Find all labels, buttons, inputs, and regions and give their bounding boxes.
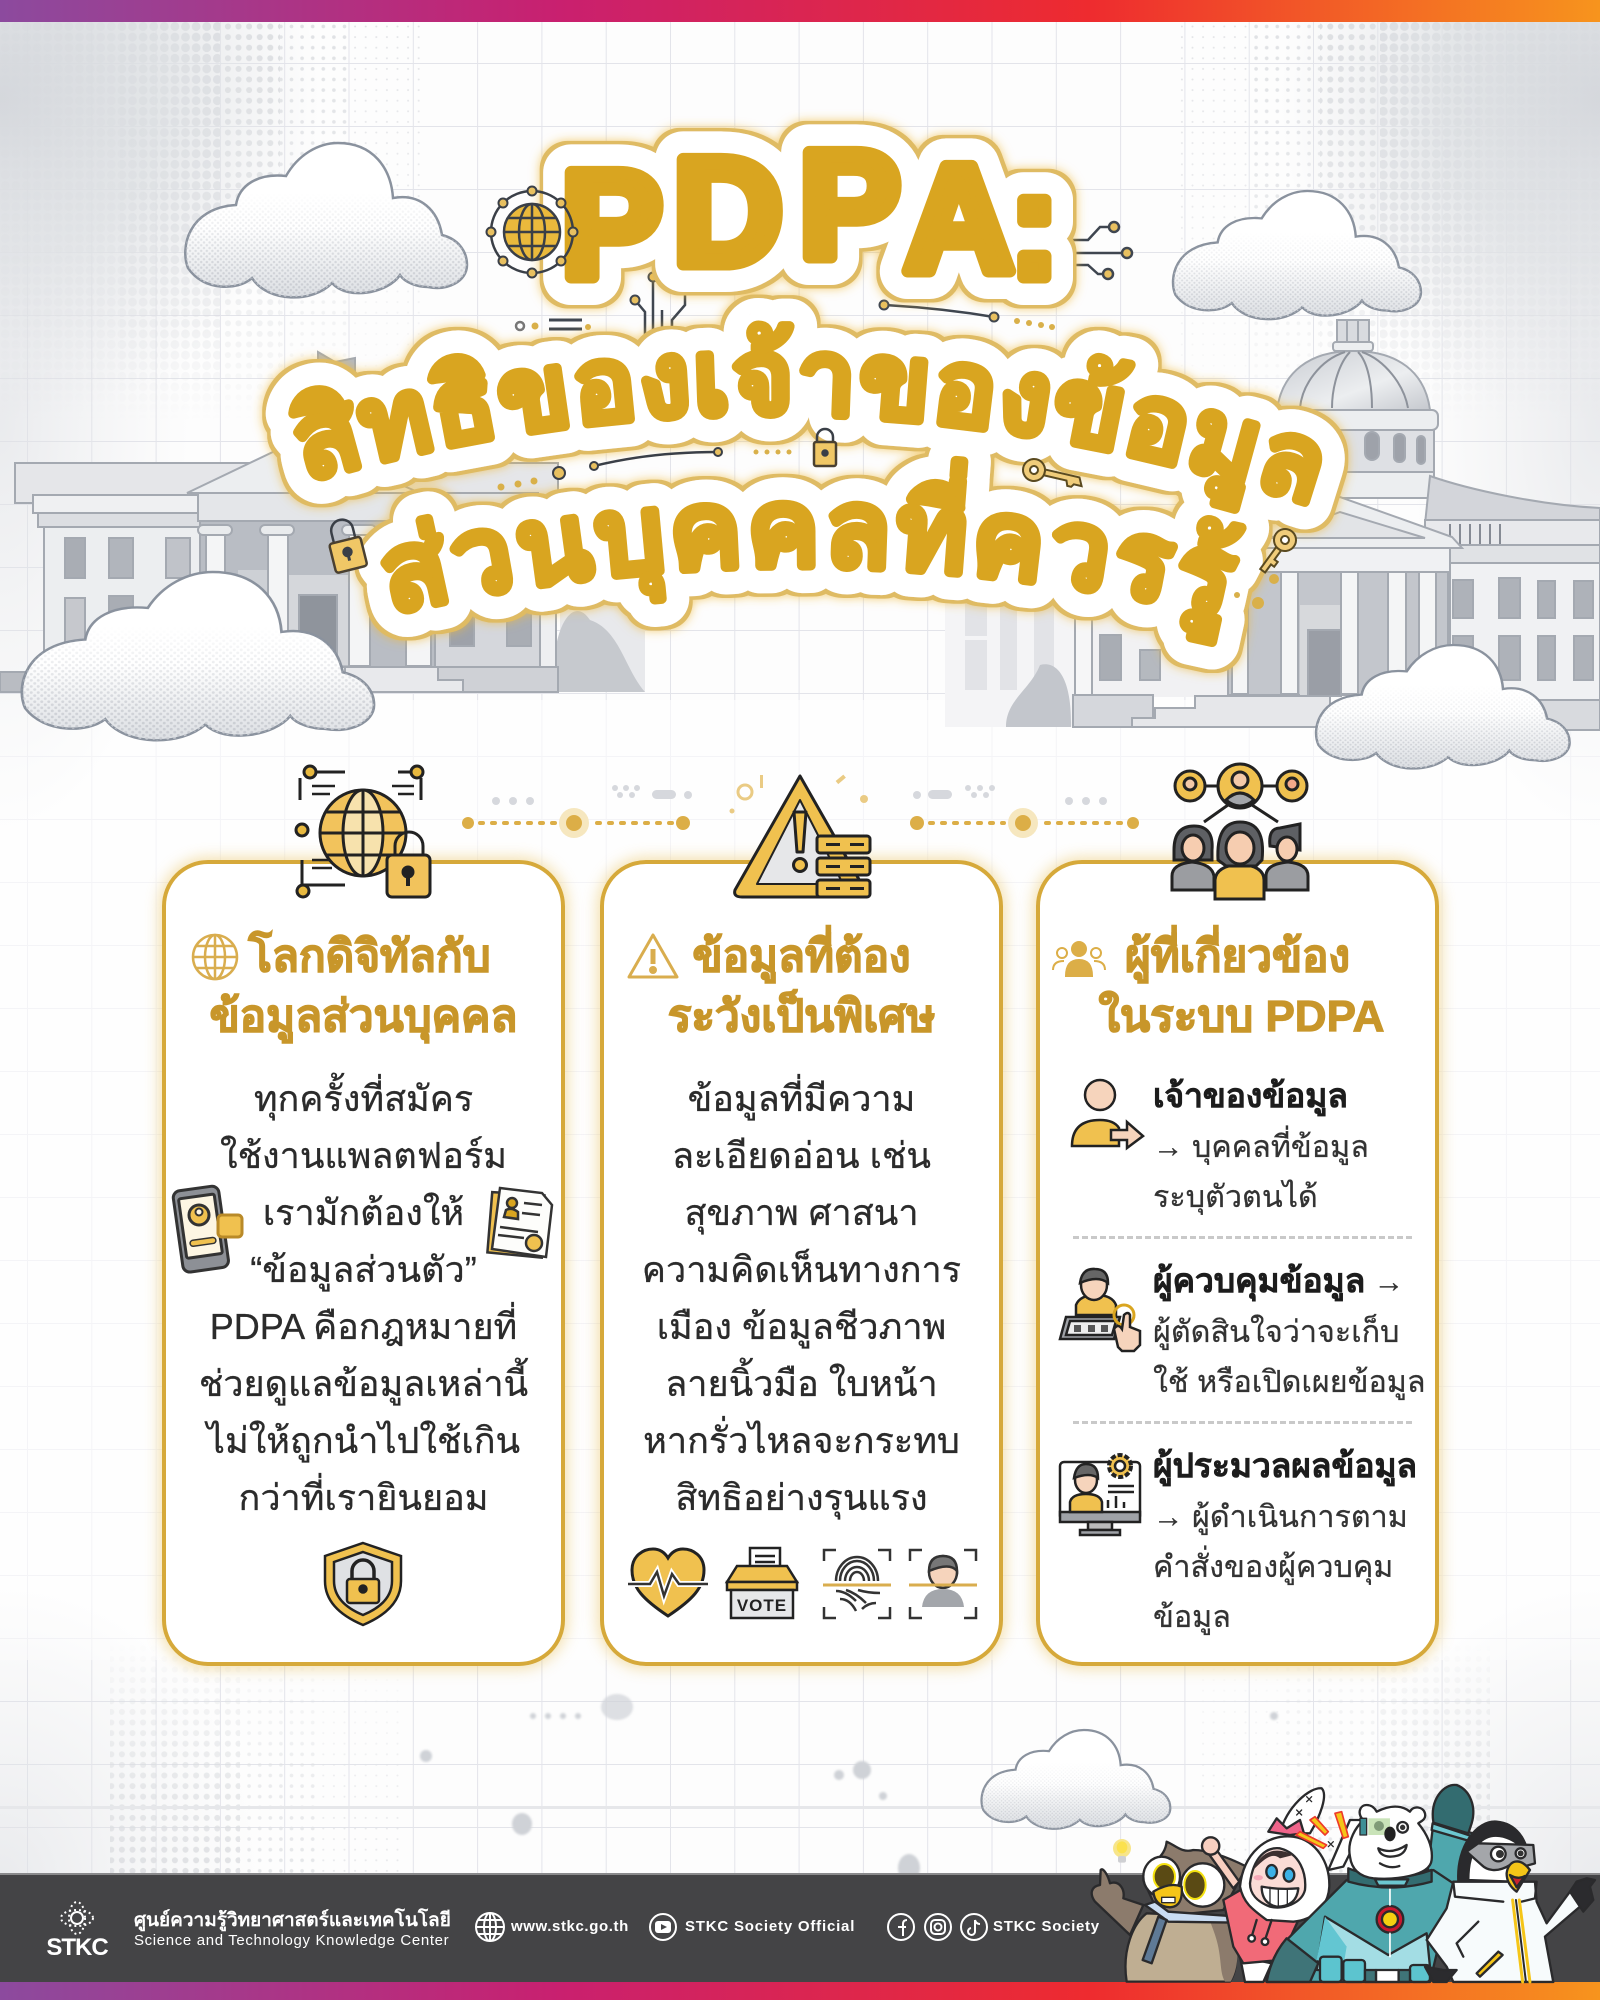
text: data owner bbox=[1153, 1078, 1369, 1215]
footer logo STKC bbox=[44, 1900, 110, 1960]
icon: shield with lock bbox=[321, 1541, 405, 1627]
divider two bbox=[1073, 1421, 1412, 1424]
title: ส่วนบุคคลที่ควรรู้ bbox=[380, 456, 1247, 647]
footer youtube name: STKC Society Official bbox=[685, 1918, 855, 1935]
text: data owner: เจ้าของข้อมูล bbox=[1153, 1078, 1348, 1115]
mascot: penguin bbox=[1425, 1822, 1595, 1982]
icon: group of people bbox=[1170, 762, 1310, 900]
text: data controller: ผู้ตัดสินใจว่าจะเก็บ bbox=[1153, 1315, 1399, 1349]
body text: card one: ทุกครั้งที่สมัคร bbox=[254, 1078, 473, 1119]
body text: card two: ข้อมูลที่มีความ bbox=[688, 1078, 915, 1119]
heading: digital world: โลกดิจิทัลกับ bbox=[248, 932, 491, 981]
text: data controller: ผู้ควบคุมข้อมูล → bbox=[1153, 1263, 1404, 1300]
icon: warning triangle with server bbox=[733, 774, 872, 898]
mascot: bear bbox=[1267, 1785, 1473, 1982]
heading: people involved bbox=[1098, 924, 1384, 1041]
body text: card one bbox=[199, 1072, 528, 1518]
icon: fingerprint scan bbox=[822, 1547, 892, 1621]
icon: face scan bbox=[908, 1547, 978, 1621]
icon: youtube bbox=[649, 1913, 677, 1941]
icon: vote box: VOTE bbox=[737, 1596, 787, 1615]
heading: sensitive data: ข้อมูลที่ต้อง bbox=[693, 932, 910, 981]
text: data controller bbox=[1153, 1263, 1426, 1400]
connector: left bbox=[462, 785, 692, 838]
top gradient bar bbox=[0, 0, 1600, 22]
title decorations: globe, locks and keys bbox=[328, 186, 1297, 609]
title: สิทธิของเจ้าของข้อมูล bbox=[254, 287, 1356, 540]
text: data processor: คำสั่งของผู้ควบคุม bbox=[1153, 1550, 1393, 1584]
body text: card one: ช่วยดูแลข้อมูลเหล่านี้ bbox=[199, 1363, 528, 1404]
panel: people involved in PDPA bbox=[1036, 860, 1439, 1666]
heading: sensitive data: ระวังเป็นพิเศษ bbox=[668, 992, 935, 1041]
cloud: top right bbox=[1172, 190, 1422, 320]
panel: digital world and personal data bbox=[162, 860, 565, 1666]
icon: document bbox=[484, 1185, 556, 1265]
text: data processor: → ผู้ดำเนินการตาม bbox=[1153, 1500, 1408, 1534]
icon: warning sparks bbox=[730, 774, 868, 814]
body text: card one: ใช้งานแพลตฟอร์ม bbox=[220, 1135, 507, 1176]
mascot: owl bbox=[1092, 1842, 1247, 1982]
body text: card two: สิทธิอย่างรุนแรง bbox=[675, 1477, 928, 1518]
title: PDPA: bbox=[561, 120, 1060, 310]
heading: sensitive data bbox=[668, 924, 935, 1041]
icon: social media bbox=[887, 1913, 997, 1941]
cloud: bottom bbox=[980, 1728, 1172, 1830]
body text: card two: ละเอียดอ่อน เช่น bbox=[672, 1135, 931, 1176]
body text: card one: เรามักต้องให้ bbox=[263, 1192, 464, 1233]
body text: card one: กว่าที่เรายินยอม bbox=[239, 1477, 488, 1518]
footer logo STKC: STKC bbox=[46, 1934, 108, 1961]
icon: data processor bbox=[1058, 1452, 1142, 1540]
heading: people involved: ในระบบ PDPA bbox=[1099, 992, 1384, 1041]
icon: heading warning bbox=[628, 933, 679, 978]
title: ส่วนบุคคลที่ควรรู้ bbox=[349, 448, 1280, 681]
panel: sensitive data bbox=[600, 860, 1003, 1666]
heading: digital world bbox=[210, 929, 517, 1044]
title: PDPA: bbox=[561, 120, 1060, 310]
divider one bbox=[1073, 1236, 1412, 1239]
light bulb bbox=[1113, 1839, 1131, 1863]
body text: card two: ความคิดเห็นทางการ bbox=[642, 1249, 961, 1290]
title: สิทธิของเจ้าของข้อมูล bbox=[288, 320, 1322, 514]
icon: data controller bbox=[1058, 1265, 1142, 1353]
body text: card one: “ข้อมูลส่วนตัว” bbox=[250, 1249, 477, 1290]
body text: card two: เมือง ข้อมูลชีวภาพ bbox=[657, 1306, 946, 1347]
connector: right bbox=[910, 785, 1139, 838]
body text: card one: PDPA คือกฎหมายที่ bbox=[210, 1306, 517, 1347]
text: data controller: ใช้ หรือเปิดเผยข้อมูล bbox=[1153, 1365, 1426, 1399]
footer organisation name: ศูนย์ความรู้วิทยาศาสตร์และเทคโนโลยี bbox=[134, 1910, 451, 1931]
icon: data owner bbox=[1069, 1078, 1145, 1152]
icon: heading globe bbox=[192, 934, 238, 980]
body text: card two: หากรั่วไหลจะกระทบ bbox=[643, 1420, 960, 1461]
cloud: lower left bbox=[20, 570, 376, 742]
icon: globe documents and lock bbox=[294, 764, 432, 898]
footer band bbox=[0, 1873, 1600, 1982]
text: data processor: ผู้ประมวลผลข้อมูล bbox=[1153, 1448, 1417, 1485]
text: data owner: ระบุตัวตนได้ bbox=[1153, 1180, 1318, 1214]
body text: card two bbox=[642, 1074, 961, 1520]
body text: card one: ไม่ให้ถูกนำไปใช้เกิน bbox=[207, 1420, 520, 1461]
body text: card two: ลายนิ้วมือ ใบหน้า bbox=[665, 1363, 938, 1404]
icon: website globe bbox=[474, 1911, 506, 1943]
title decorations behind title: circuits bbox=[514, 220, 1134, 334]
icon: vote box bbox=[725, 1546, 799, 1620]
text: data processor bbox=[1153, 1448, 1417, 1636]
footer organisation english name: Science and Technology Knowledge Center bbox=[134, 1932, 449, 1949]
bottom gradient bar bbox=[0, 1982, 1600, 2000]
title bbox=[254, 113, 1356, 681]
heading: people involved: ผู้ที่เกี่ยวข้อง bbox=[1125, 932, 1350, 981]
heading: digital world: ข้อมูลส่วนบุคคล bbox=[210, 992, 517, 1041]
text: data processor: ข้อมูล bbox=[1153, 1600, 1231, 1634]
body text: card two: สุขภาพ ศาสนา bbox=[684, 1192, 919, 1233]
cloud: top left bbox=[184, 142, 468, 299]
footer website: www.stkc.go.th bbox=[511, 1918, 629, 1935]
footer social name: STKC Society bbox=[993, 1918, 1100, 1935]
cloud: lower right bbox=[1314, 644, 1571, 770]
mascot: pink girl bbox=[1202, 1788, 1367, 1982]
text: data owner: → บุคคลที่ข้อมูล bbox=[1153, 1130, 1369, 1164]
icon: phone with profile bbox=[172, 1185, 244, 1275]
icon: heading people bbox=[1052, 941, 1106, 977]
icon: heart with pulse bbox=[626, 1546, 710, 1620]
